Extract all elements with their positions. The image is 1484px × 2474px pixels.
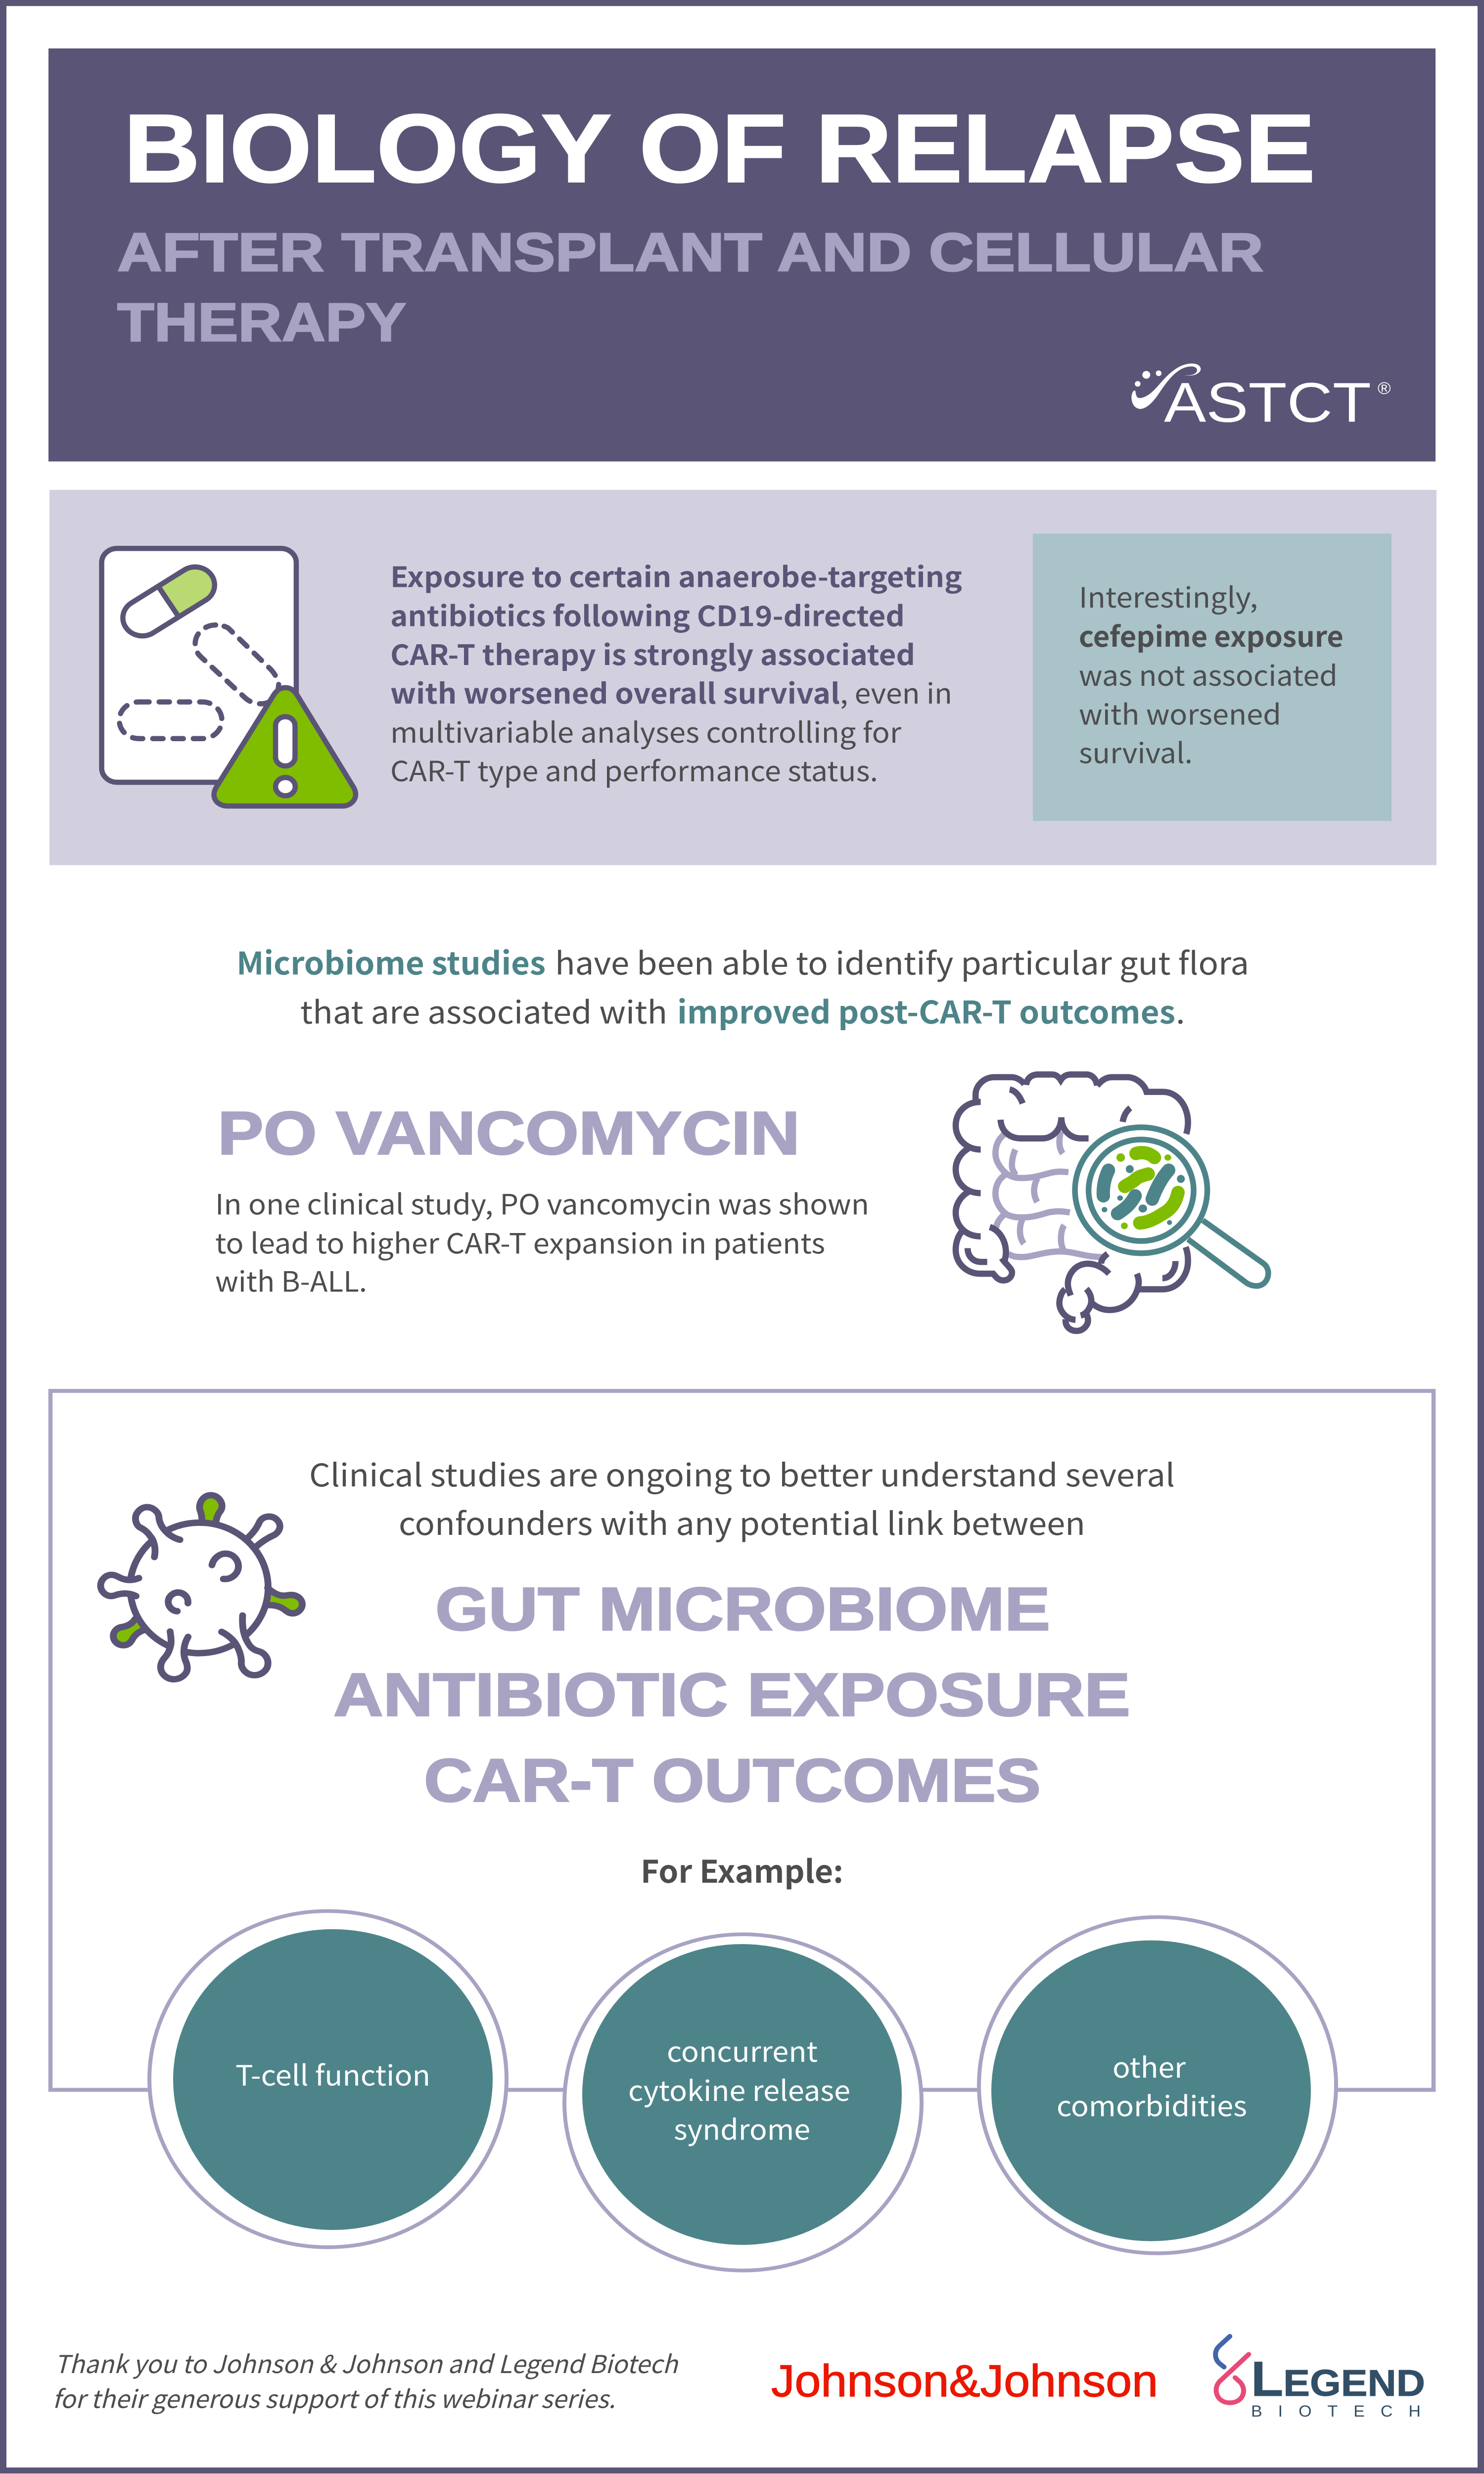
logo: Legend Biotech	[1215, 2336, 1425, 2420]
logo: ASTCT: ASTCT	[1164, 372, 1371, 434]
callout: cefepime: cefepime exposure	[1079, 614, 1344, 655]
title: BIOLOGY OF RELAPSE	[124, 94, 1315, 202]
text block: antibiotic finding: CAR-T type and performance status.	[390, 749, 878, 790]
circle: cytokine release syndrome	[564, 1934, 922, 2271]
circle: other comorbidities: comorbidities	[1057, 2084, 1247, 2125]
logo: Legend Biotech: BIOTECH	[1251, 2402, 1421, 2420]
text block: antibiotic finding: antibiotics following CD19-directed	[390, 594, 905, 634]
panel: header banner	[48, 48, 1436, 462]
callout: cefepime: was not associated	[1079, 653, 1338, 694]
text block: microbiome studies	[236, 939, 1249, 1033]
text block: PO vancomycin study: In one clinical study, PO vancomycin was shown	[215, 1182, 869, 1223]
text block: sponsor thanks: Thank you to Johnson & Johnson and Legend Biotech	[54, 2344, 679, 2380]
text block: microbiome studies: .	[1176, 988, 1185, 1033]
circle: cytokine release syndrome: syndrome	[674, 2107, 810, 2148]
subtitle: AFTER TRANSPLANT AND CELLULAR	[117, 222, 1263, 283]
circle: other comorbidities: other	[1113, 2045, 1186, 2086]
circle: cytokine release syndrome: concurrent	[667, 2029, 818, 2070]
icon: pill chart with warning triangle	[102, 548, 356, 806]
callout: cefepime	[1033, 533, 1391, 821]
text block: ongoing clinical studies	[309, 1450, 1175, 1544]
circle: cytokine release syndrome: cytokine release	[628, 2068, 850, 2109]
text block: ongoing clinical studies: confounders with any potential link between	[399, 1499, 1085, 1544]
callout: cefepime: survival.	[1079, 731, 1193, 771]
logo: Johnson & Johnson: Johnson&Johnson	[771, 2355, 1158, 2406]
text block: PO vancomycin study	[215, 1182, 869, 1300]
heading: gut microbiome, antibiotic exposure, CAR-T outcomes: ANTIBIOTIC EXPOSURE	[333, 1661, 1130, 1729]
text block: antibiotic finding: Exposure to certain anaerobe-targeting	[390, 555, 962, 595]
circle: other comorbidities	[979, 1917, 1336, 2253]
panel: confounders	[50, 1391, 1434, 2271]
heading: gut microbiome, antibiotic exposure, CAR-T outcomes	[333, 1575, 1130, 1814]
callout: cefepime: Interestingly,	[1079, 575, 1258, 616]
text block: antibiotic finding: multivariable analyses controlling for	[390, 710, 901, 751]
text block: microbiome studies: improved post-CAR-T outcomes	[677, 988, 1175, 1033]
text block: antibiotic finding: with worsened overall survival	[390, 671, 840, 712]
text block: microbiome studies: that are associated with	[300, 988, 667, 1033]
text block: ongoing clinical studies: Clinical studies are ongoing to better understand several	[309, 1450, 1175, 1495]
icon: virus	[100, 1495, 302, 1679]
text block: sponsor thanks: for their generous support of this webinar series.	[52, 2379, 615, 2415]
logo: ASTCT	[1131, 364, 1391, 434]
text block: PO vancomycin study: with B-ALL.	[215, 1259, 367, 1300]
text block: microbiome studies: have been able to identify particular gut flora	[555, 939, 1249, 984]
subtitle: THERAPY	[117, 292, 406, 352]
heading: gut microbiome, antibiotic exposure, CAR-T outcomes: GUT MICROBIOME	[435, 1575, 1050, 1643]
logo: Legend Biotech: LEGEND	[1251, 2351, 1425, 2406]
panel: antibiotic exposure	[49, 490, 1437, 865]
subtitle	[117, 222, 1263, 352]
text block: antibiotic finding: , even in	[840, 671, 952, 712]
text block: antibiotic finding	[390, 555, 962, 790]
circle: T-cell function	[149, 1911, 507, 2247]
text block: PO vancomycin study: to lead to higher CAR-T expansion in patients	[215, 1221, 825, 1262]
logo: ASTCT: ®	[1378, 379, 1391, 398]
callout: cefepime: with worsened	[1079, 692, 1281, 733]
heading: PO vancomycin: PO VANCOMYCIN	[218, 1099, 800, 1167]
text block: antibiotic finding: CAR-T therapy is strongly associated	[390, 632, 915, 673]
heading: gut microbiome, antibiotic exposure, CAR-T outcomes: CAR-T OUTCOMES	[424, 1746, 1041, 1814]
circle: T-cell function: T-cell function	[235, 2053, 430, 2094]
text block: microbiome studies: Microbiome studies	[236, 939, 546, 984]
text: for example: For Example:	[641, 1847, 843, 1892]
icon: gut with magnifier and bacteria	[956, 1075, 1268, 1331]
text block: sponsor thanks	[52, 2344, 679, 2415]
